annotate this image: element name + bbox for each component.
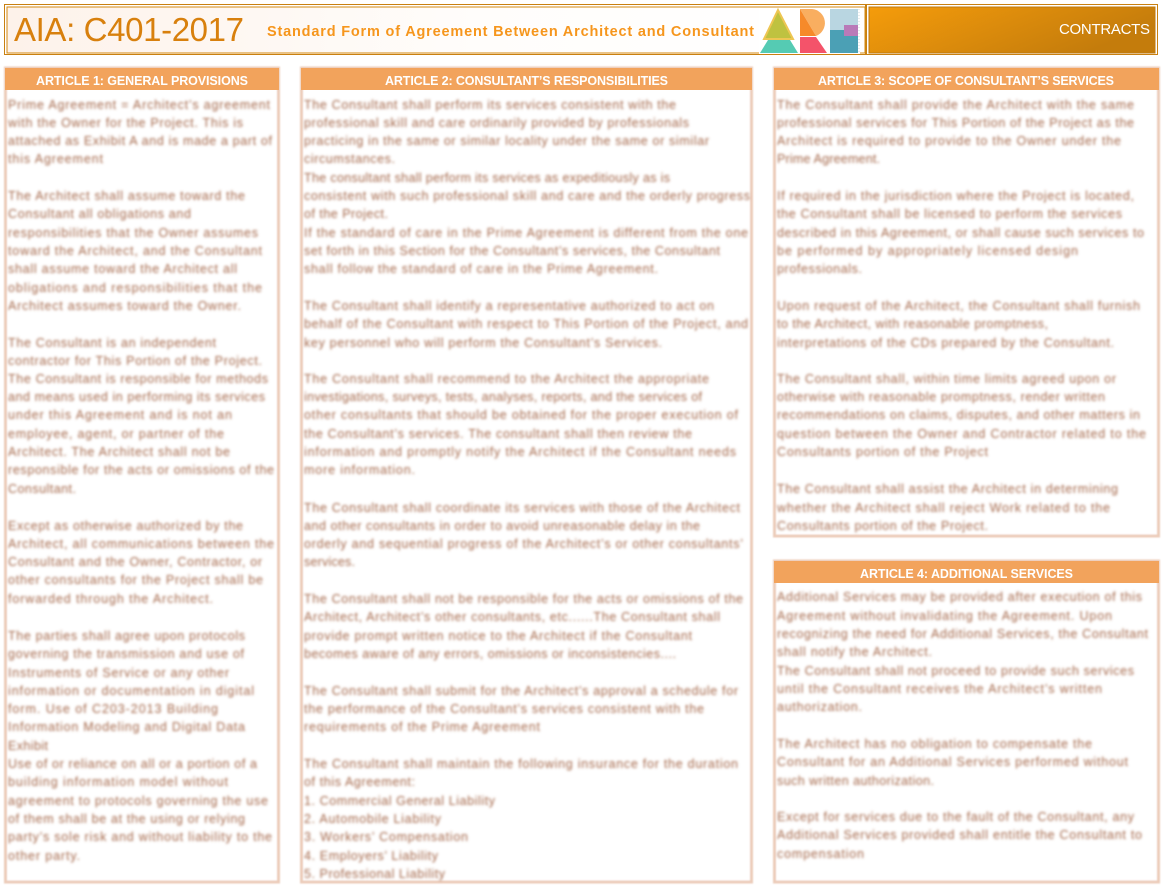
text block: with the Owner for the Project. This is: [7, 116, 243, 130]
heading: ARTICLE 3: SCOPE OF CONSULTANT’S SERVICES: [818, 74, 1114, 88]
text block: Consultant.: [8, 482, 76, 496]
text block: described in this Agreement, or shall cause such services to: [777, 226, 1144, 240]
text block: Prime Agreement = Architect’s agreement: [8, 98, 271, 112]
text block: The Consultant shall identify a representative authorized to act on: [304, 299, 714, 313]
panel: article 4: [774, 561, 1159, 882]
text block: [304, 98, 750, 881]
text block: The Consultant is responsible for methods: [8, 372, 268, 386]
text block: recommendations on claims, disputes, and other matters in: [777, 408, 1140, 422]
text block: 3. Workers’ Compensation: [304, 830, 468, 844]
text block: be performed by appropriately licensed design: [777, 244, 1078, 258]
text block: The Consultant shall not be responsible for the acts or omissions of the: [304, 592, 743, 606]
text block: of the Project.: [304, 207, 388, 221]
text block: consistent with such professional skill and care and the orderly progress: [304, 189, 750, 203]
text block: professionals.: [777, 262, 862, 276]
text block: The Consultant is an independent: [8, 336, 217, 350]
text block: becomes aware of any errors, omissions or inconsistencies....: [304, 647, 676, 661]
contracts box: CONTRACTS: [1059, 21, 1150, 38]
text block: 5. Professional Liability: [304, 867, 446, 881]
text block: The Consultant shall submit for the Architect’s approval a schedule for: [304, 684, 738, 698]
text block: whether the Architect shall reject Work related to the: [776, 501, 1110, 515]
text block: shall follow the standard of care in the Prime Agreement.: [304, 262, 658, 276]
text block: responsible for the acts or omissions of the: [8, 463, 274, 477]
text block: Agreement without invalidating the Agreement. Upon: [777, 609, 1112, 623]
panel: article 3: [774, 68, 1159, 536]
text block: Architect is required to provide to the Owner under the: [777, 134, 1121, 148]
text block: 4. Employers’ Liability: [304, 849, 439, 863]
heading: [5, 68, 279, 90]
text block: The Architect has no obligation to compensate the: [777, 737, 1092, 751]
heading: [301, 68, 752, 90]
text block: compensation: [777, 847, 864, 861]
text block: services.: [304, 555, 355, 569]
text block: Except as otherwise authorized by the: [8, 519, 243, 533]
text block: Consultant all obligations and: [8, 207, 191, 221]
text block: practicing in the same or similar locality under the same or similar: [304, 134, 709, 148]
text block: Architect, all communications between the: [8, 537, 274, 551]
text block: governing the transmission and use of: [8, 647, 245, 661]
text block: the performance of the Consultant’s services consistent with the: [304, 702, 704, 716]
text block: The Consultant shall, within time limits agreed upon or: [777, 372, 1116, 386]
text block: [777, 590, 1149, 861]
text block: Consultant and the Owner, Contractor, or: [8, 555, 262, 569]
text block: shall notify the Architect.: [777, 645, 932, 659]
text block: The Consultant shall perform its services consistent with the: [304, 98, 676, 112]
text block: The Consultant shall provide the Architect with the same: [777, 98, 1134, 112]
logo: [759, 8, 860, 54]
text block: the Consultant shall be licensed to perform the services: [777, 207, 1122, 221]
text block: The Architect shall assume toward the: [8, 189, 245, 203]
text block: The consultant shall perform its services as expeditiously as is: [304, 171, 670, 185]
text block: [7, 98, 274, 863]
heading: ARTICLE 2: CONSULTANT’S RESPONSIBILITIES: [385, 74, 668, 88]
text block: The Consultant shall assist the Architect in determining: [777, 482, 1118, 496]
text block: orderly and sequential progress of the Architect’s or other consultants’: [304, 537, 743, 551]
text block: other party.: [8, 849, 80, 863]
text block: attached as Exhibit A and is made a part of: [8, 134, 273, 148]
panel frame: [302, 68, 752, 882]
text block: Additional Services may be provided after execution of this: [777, 590, 1142, 604]
text block: interpretations of the CDs prepared by the Consultant.: [777, 336, 1114, 350]
text block: The Consultant shall coordinate its services with those of the Architect: [304, 501, 741, 515]
text block: under this Agreement and is not an: [8, 408, 232, 422]
text block: of them shall be at the using or relying: [8, 812, 245, 826]
text block: recognizing the need for Additional Services, the Consultant: [777, 627, 1149, 641]
text block: contractor for This Portion of the Project.: [8, 354, 262, 368]
text block: form. Use of C203-2013 Building: [8, 702, 218, 716]
text block: behalf of the Consultant with respect to This Portion of the Project, and: [304, 317, 748, 331]
title box: [4, 4, 866, 54]
heading: ARTICLE 4: ADDITIONAL SERVICES: [860, 567, 1073, 581]
text block: Use of or reliance on all or a portion of a: [8, 757, 257, 771]
panel frame: [774, 561, 1158, 882]
text block: forwarded through the Architect.: [8, 592, 213, 606]
text block: requirements of the Prime Agreement: [304, 720, 541, 734]
text block: of this Agreement:: [304, 775, 415, 789]
text block: Except for services due to the fault of the Consultant, any: [777, 810, 1135, 824]
text block: The Consultant shall maintain the following insurance for the duration: [304, 757, 738, 771]
header bar: [4, 4, 1158, 54]
text block: employee, agent, or partner of the: [8, 427, 224, 441]
text block: toward the Architect, and the Consultant: [8, 244, 263, 258]
text block: and other consultants in order to avoid unreasonable delay in the: [304, 519, 700, 533]
text block: Information Modeling and Digital Data: [8, 720, 245, 734]
text block: The parties shall agree upon protocols: [8, 629, 245, 643]
text block: [776, 98, 1146, 533]
text block: responsibilities that the Owner assumes: [8, 226, 258, 240]
text block: The Consultant shall recommend to the Architect the appropriate: [304, 372, 709, 386]
contracts box: [866, 4, 1158, 54]
title: AIA: C401-2017: [14, 11, 244, 48]
text block: provide prompt written notice to the Architect if the Consultant: [304, 629, 693, 643]
text block: 1. Commercial General Liability: [304, 794, 496, 808]
text block: shall assume toward the Architect all: [8, 262, 237, 276]
panel frame: [774, 68, 1158, 536]
text block: other consultants for the Project shall be: [8, 573, 263, 587]
text block: If required in the jurisdiction where the Project is located,: [777, 189, 1134, 203]
text block: Consultants portion of the Project.: [777, 519, 988, 533]
text block: obligations and responsibilities that the: [8, 281, 262, 295]
heading: ARTICLE 1: GENERAL PROVISIONS: [36, 74, 248, 88]
text block: The Consultant shall not proceed to provide such services: [777, 664, 1134, 678]
heading: [774, 561, 1159, 583]
text block: such written authorization.: [777, 774, 934, 788]
text block: to the Architect, with reasonable promptness,: [777, 317, 1048, 331]
text block: circumstances.: [304, 152, 395, 166]
text block: Exhibit: [8, 739, 49, 753]
text block: professional skill and care ordinarily provided by professionals: [304, 116, 689, 130]
heading: [774, 68, 1159, 90]
text block: Upon request of the Architect, the Consultant shall furnish: [777, 299, 1140, 313]
text block: Additional Services provided shall entitle the Consultant to: [777, 828, 1142, 842]
text block: Architect. The Architect shall not be: [8, 445, 230, 459]
text block: information or documentation in digital: [8, 684, 254, 698]
text block: Architect, Architect’s other consultants, etc......The Consultant shall: [304, 610, 720, 624]
text block: the Consultant’s services. The consultant shall then review the: [304, 427, 692, 441]
text block: more information.: [304, 463, 415, 477]
text block: question between the Owner and Contractor related to the: [777, 427, 1146, 441]
text block: Architect assumes toward the Owner.: [8, 299, 241, 313]
text block: Consultant for an Additional Services performed without: [777, 755, 1129, 769]
panel: article 1: [5, 68, 279, 882]
text block: and means used in performing its services: [8, 390, 265, 404]
text block: investigations, surveys, tests, analyses, reports, and the services of: [304, 390, 703, 404]
text block: agreement to protocols governing the use: [8, 794, 268, 808]
text block: party’s sole risk and without liability to the: [8, 830, 272, 844]
text block: until the Consultant receives the Architect’s written: [777, 682, 1102, 696]
panel frame: [6, 68, 278, 882]
text block: 2. Automobile Liability: [304, 812, 442, 826]
text block: information and promptly notify the Architect if the Consultant needs: [304, 445, 736, 459]
panel: article 2: [301, 68, 752, 882]
text block: otherwise with reasonable promptness, render written: [777, 390, 1105, 404]
text block: Prime Agreement.: [777, 152, 880, 166]
text block: professional services for This Portion of the Project as the: [777, 116, 1134, 130]
text block: authorization.: [777, 700, 862, 714]
text block: Instruments of Service or any other: [8, 666, 229, 680]
subtitle: Standard Form of Agreement Between Architect and Consultant: [267, 24, 754, 40]
text block: other consultants that should be obtained for the proper execution of: [304, 408, 739, 422]
text block: this Agreement: [8, 152, 104, 166]
text block: set forth in this Section for the Consultant’s services, the Consultant: [304, 244, 721, 258]
text block: key personnel who will perform the Consultant’s Services.: [304, 336, 662, 350]
text block: Consultants portion of the Project: [777, 445, 989, 459]
text block: building information model without: [8, 775, 229, 789]
text block: If the standard of care in the Prime Agreement is different from the one: [304, 226, 748, 240]
